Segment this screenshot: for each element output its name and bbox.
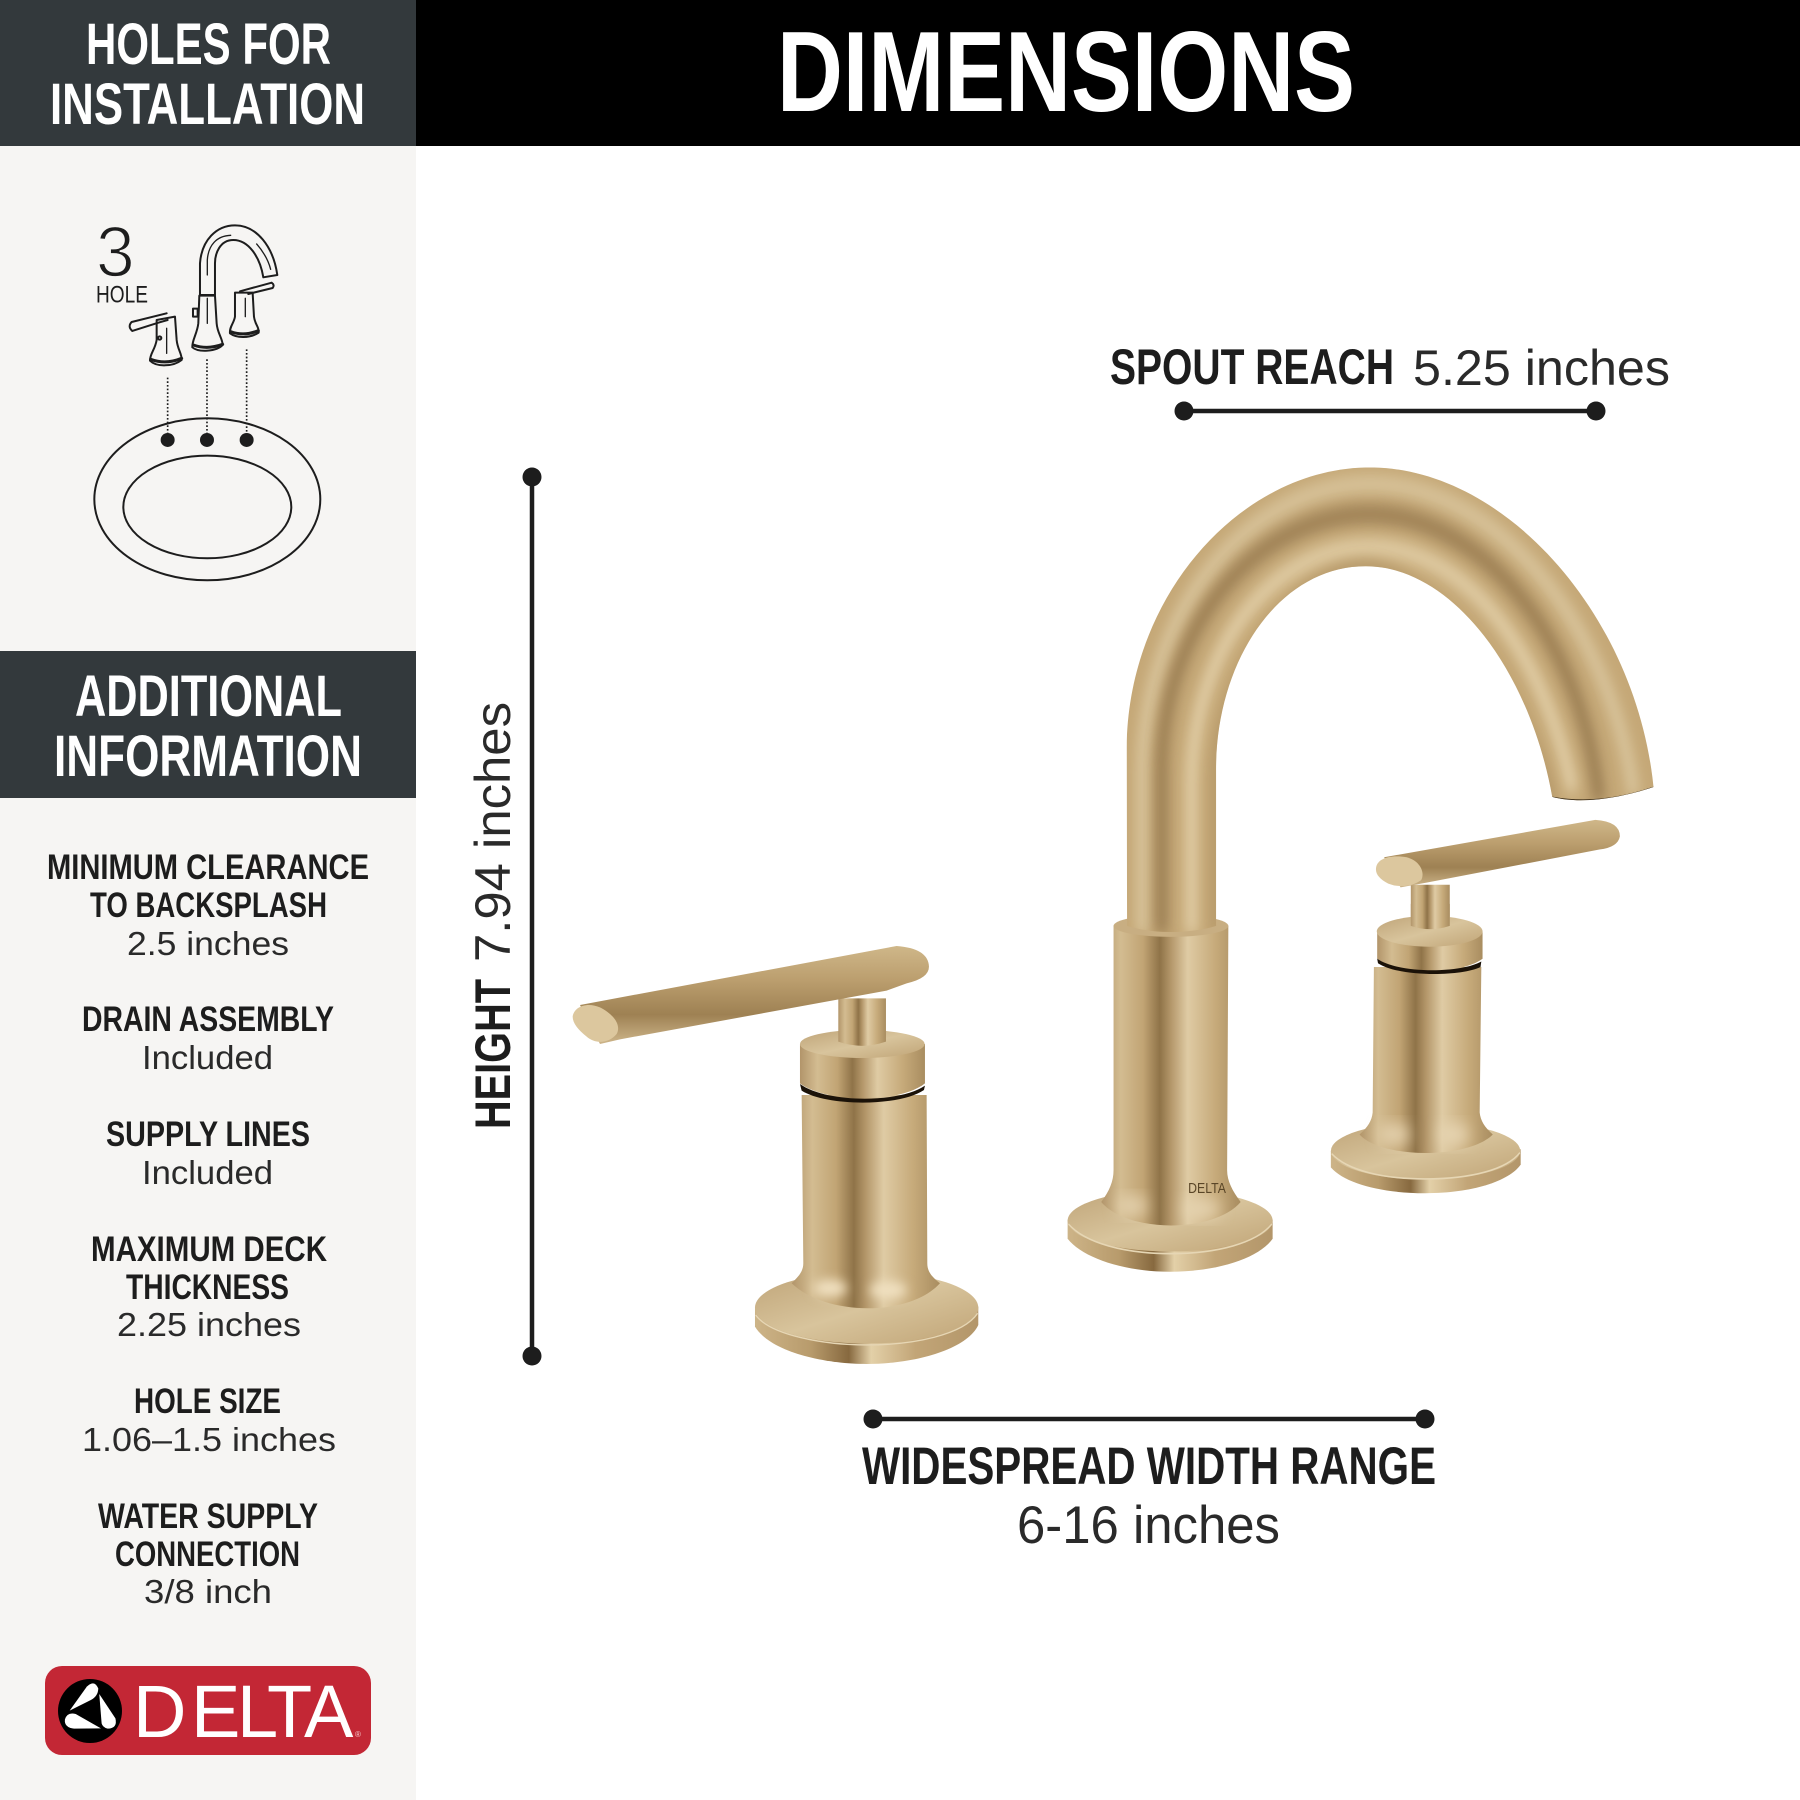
spec: maximum deck thickness: 2.25 inches bbox=[117, 1306, 301, 1343]
spec: hole size: HOLE SIZE bbox=[134, 1382, 281, 1421]
brand mark on body: DELTA bbox=[1188, 1180, 1226, 1197]
logo: delta bbox=[45, 1666, 371, 1755]
heading: additional information bbox=[0, 651, 416, 798]
icon: three hole faucet and basin line drawing bbox=[94, 213, 320, 580]
spec: water supply connection: 3/8 inch bbox=[144, 1573, 272, 1610]
spec: hole size bbox=[82, 1382, 336, 1458]
dimension: height: HEIGHT bbox=[465, 979, 521, 1129]
centre body and base bbox=[1068, 915, 1273, 1272]
title banner: dimensions bbox=[416, 0, 1800, 146]
panel: left sidebar background bbox=[0, 0, 416, 1800]
dimension: widespread width range: WIDESPREAD WIDTH RANGE bbox=[862, 1437, 1436, 1496]
icon: centre spout bbox=[192, 225, 277, 351]
spec: maximum deck thickness: MAXIMUM DECK bbox=[91, 1230, 327, 1269]
dimension: spout reach: SPOUT REACH bbox=[1110, 339, 1394, 395]
icon: basin bbox=[94, 418, 320, 580]
spec: supply lines bbox=[106, 1115, 310, 1191]
logo: delta: DELTA bbox=[133, 1670, 354, 1753]
spec: water supply connection: CONNECTION bbox=[115, 1535, 300, 1574]
spec: minimum clearance to backsplash: MINIMUM CLEARANCE bbox=[47, 848, 369, 887]
dimension: height: 7.94 inches bbox=[465, 702, 521, 962]
title banner: dimensions: DIMENSIONS bbox=[777, 9, 1355, 136]
heading: holes for installation: HOLES FOR bbox=[86, 12, 331, 77]
product photo: centre spout and right handle bbox=[1068, 456, 1665, 1272]
spec: drain assembly: DRAIN ASSEMBLY bbox=[82, 1000, 334, 1039]
spec: drain assembly bbox=[82, 1000, 334, 1076]
spec: minimum clearance to backsplash: 2.5 inches bbox=[127, 925, 289, 962]
heading: additional information: INFORMATION bbox=[54, 724, 362, 789]
dimension: widespread width range: 6-16 inches bbox=[1017, 1496, 1280, 1555]
spec: supply lines: SUPPLY LINES bbox=[106, 1115, 310, 1154]
dimension: widespread width range bbox=[862, 1410, 1436, 1555]
spec: drain assembly: Included bbox=[142, 1039, 273, 1076]
heading: holes for installation: INSTALLATION bbox=[50, 72, 365, 137]
label: 3 hole: 3 bbox=[96, 213, 135, 293]
right handle bbox=[1331, 820, 1620, 1193]
spec: supply lines: Included bbox=[142, 1154, 273, 1191]
dimension: height bbox=[465, 468, 542, 1366]
spec: hole size: 1.06–1.5 inches bbox=[82, 1421, 336, 1458]
icon: right handle bbox=[230, 283, 274, 337]
icon: left handle bbox=[130, 313, 182, 365]
label: 3 hole: HOLE bbox=[96, 281, 148, 308]
dotted guide lines bbox=[168, 349, 247, 433]
spec: maximum deck thickness bbox=[91, 1230, 327, 1343]
spec: water supply connection: WATER SUPPLY bbox=[98, 1497, 318, 1536]
spout tube bbox=[1112, 456, 1665, 940]
label: 3 hole bbox=[96, 213, 148, 308]
dimension: spout reach bbox=[1110, 339, 1670, 420]
heading: additional information: ADDITIONAL bbox=[75, 664, 342, 729]
spec: minimum clearance to backsplash bbox=[47, 848, 369, 962]
heading: holes for installation bbox=[0, 0, 416, 146]
logo: delta: ® bbox=[355, 1730, 361, 1739]
dimension: spout reach: 5.25 inches bbox=[1413, 340, 1670, 396]
spec: maximum deck thickness: THICKNESS bbox=[126, 1268, 289, 1307]
product photo: left handle bbox=[573, 946, 978, 1364]
spec: water supply connection bbox=[98, 1497, 318, 1610]
spec: minimum clearance to backsplash: TO BACKSPLASH bbox=[90, 886, 327, 925]
mounting holes bbox=[161, 433, 254, 447]
